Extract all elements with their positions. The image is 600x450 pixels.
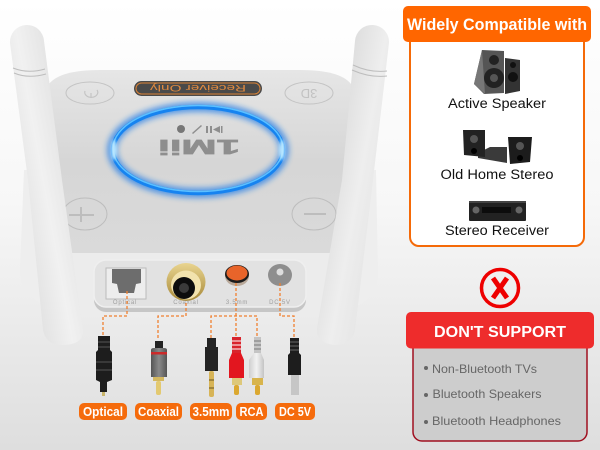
compatible header (403, 6, 591, 42)
text: Stereo Receiver: Stereo Receiver (445, 223, 550, 238)
unsupported header: DON'T SUPPORT (434, 324, 566, 341)
unsupported box (413, 335, 587, 441)
icon: red X (482, 270, 518, 306)
connector: RCA red (229, 337, 244, 395)
button: 3D (285, 82, 333, 104)
port panel (94, 260, 306, 312)
device (10, 25, 389, 345)
DC 5V port: DC 5V (269, 300, 291, 306)
button: 3D: 3D (301, 86, 317, 101)
right antenna (317, 25, 389, 345)
device side lobes (20, 170, 378, 305)
button: minus (292, 198, 336, 230)
connector: DC 5V (288, 338, 301, 395)
connector: RCA white (249, 337, 264, 395)
panel: compatible (403, 6, 591, 246)
badge: Receiver Only: Receiver Only (150, 82, 246, 93)
label: Coaxial: Coaxial (138, 405, 179, 419)
badge: Receiver Only (134, 81, 262, 96)
text: Active Speaker: Active Speaker (448, 96, 547, 111)
label: 3.5mm: 3.5mm (192, 405, 230, 419)
logo and mode icons (158, 125, 240, 157)
3.5mm port: 3.5mm (226, 300, 248, 306)
left antenna (10, 25, 83, 345)
text: Old Home Stereo: Old Home Stereo (440, 167, 554, 182)
icon: stereo receiver (469, 201, 526, 221)
compatible box (410, 30, 584, 246)
device front lip (55, 253, 345, 317)
optical port (106, 268, 146, 306)
button: plus (63, 198, 107, 230)
optical port: Optical (113, 300, 137, 306)
device body top (38, 70, 362, 254)
label: DC 5V: DC 5V (279, 405, 312, 419)
list item: Bluetooth Speakers: Bluetooth Speakers (432, 387, 542, 401)
coaxial port (166, 263, 206, 306)
connector: coaxial (151, 341, 167, 395)
connector: 3.5mm (205, 338, 218, 397)
logo: 1Mii: 1Mii (158, 135, 240, 157)
unsupported header (406, 312, 594, 348)
blue light ring (111, 106, 285, 193)
button: power (66, 82, 114, 104)
icon: home stereo (463, 130, 532, 164)
DC 5V port (268, 264, 292, 306)
3.5mm port (225, 265, 249, 306)
icon: active speakers (474, 50, 520, 94)
coaxial port: Coaxial (173, 300, 199, 306)
compatible header: Widely Compatible with (407, 16, 587, 34)
list item: Bluetooth Headphones: Bluetooth Headphones (432, 414, 561, 428)
list item: Non-Bluetooth TVs: Non-Bluetooth TVs (432, 362, 537, 376)
dashed connection lines (103, 283, 294, 340)
panel: not supported (406, 312, 594, 441)
connector: optical (96, 336, 112, 396)
label: RCA: RCA (240, 405, 264, 419)
label: Optical: Optical (83, 405, 123, 419)
